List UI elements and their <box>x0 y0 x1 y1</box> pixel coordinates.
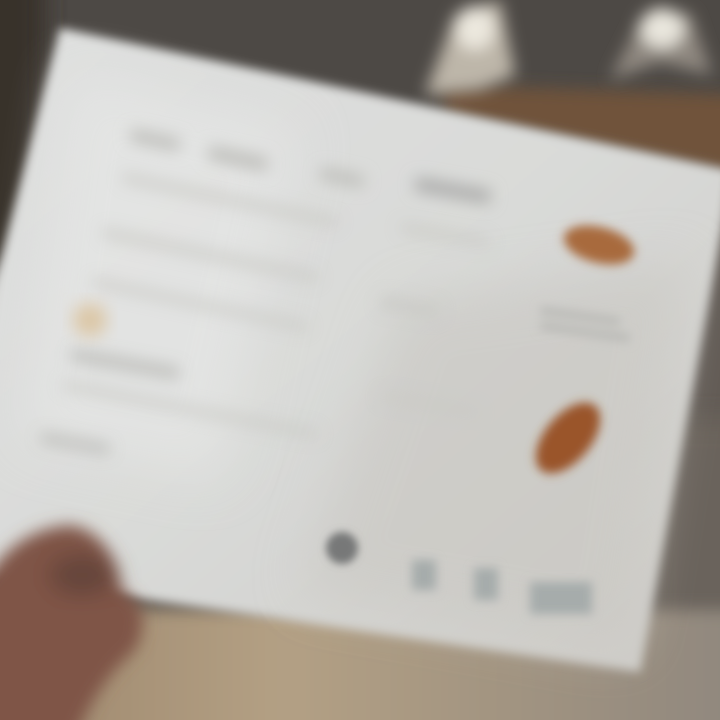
background: table surface <box>0 610 720 720</box>
background: brown shelf top right <box>445 85 720 175</box>
heading smudges <box>129 129 491 203</box>
paper shade on lower right <box>300 260 690 650</box>
grey caption smudge <box>540 306 630 342</box>
upper brown seed <box>560 219 638 271</box>
paper highlight on left <box>20 70 300 480</box>
lower brown seed <box>523 391 613 485</box>
lamp: left white glow <box>425 0 515 95</box>
bottom icons row <box>412 560 592 614</box>
dark round icon <box>326 532 358 564</box>
hand holding paper <box>0 525 143 720</box>
small tan mark <box>73 303 107 337</box>
body text smudges <box>40 172 490 455</box>
lamp: right white glow <box>610 8 712 80</box>
